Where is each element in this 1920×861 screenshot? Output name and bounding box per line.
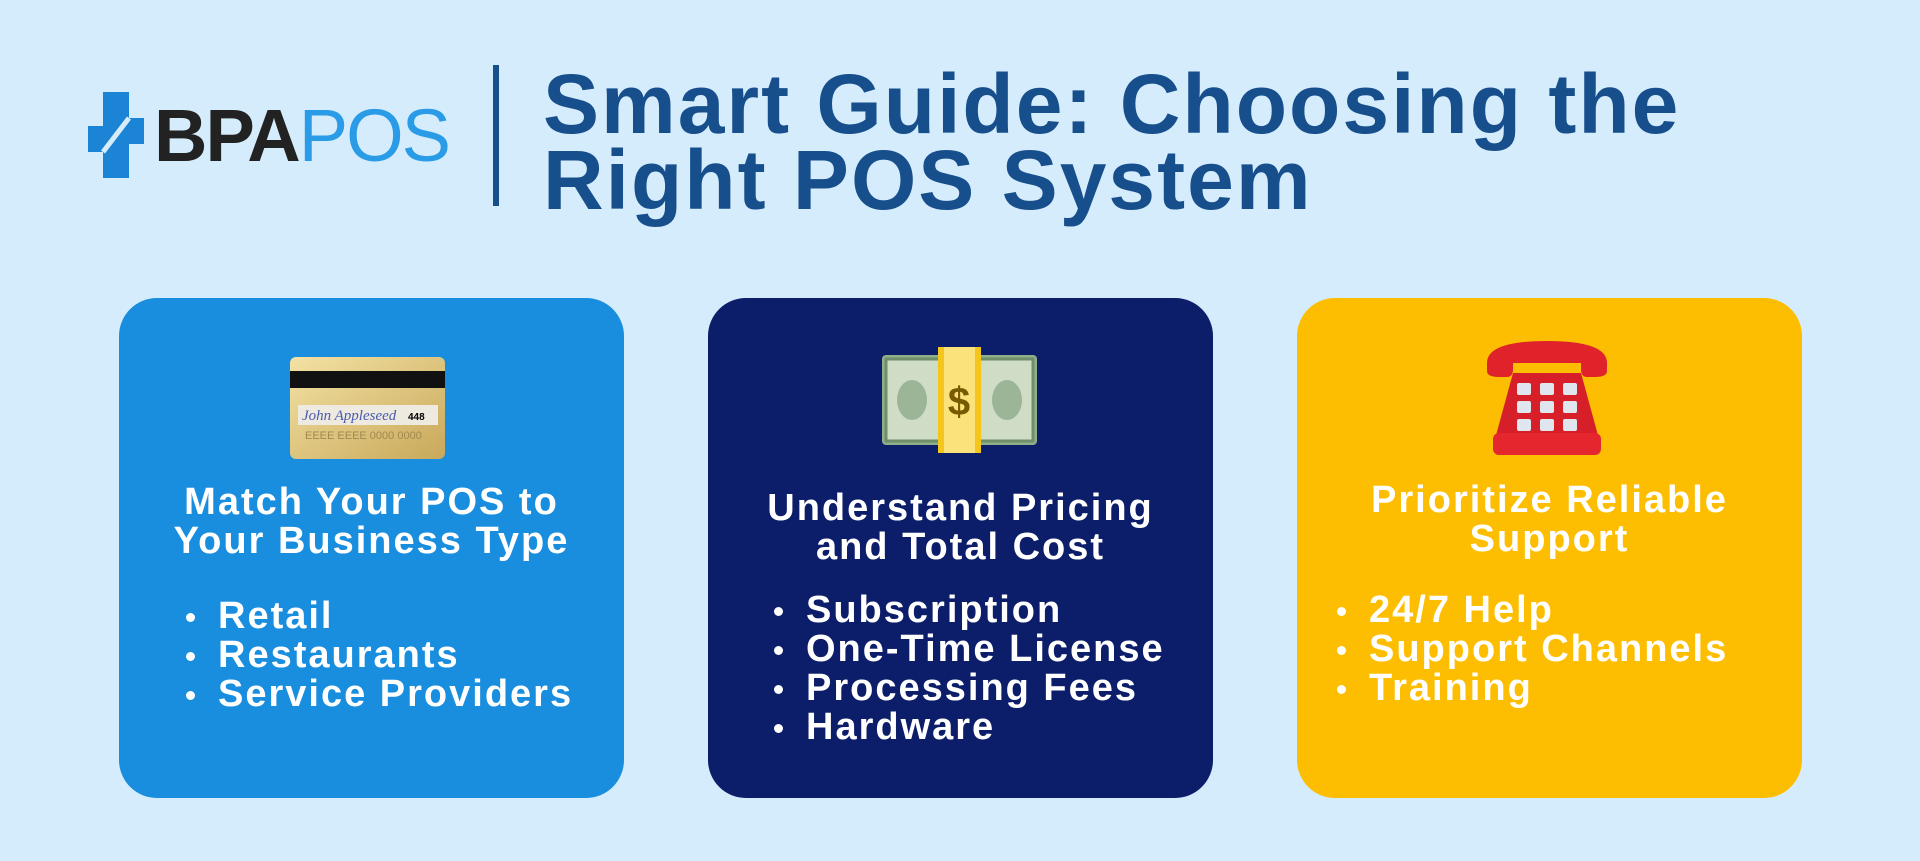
heading: Support	[1470, 518, 1629, 560]
heading: Prioritize Reliable	[1371, 479, 1728, 521]
list: Hardware	[806, 706, 995, 748]
panel: business type	[119, 298, 624, 798]
title: Right POS System	[543, 133, 1313, 227]
list	[1337, 589, 1728, 709]
icon: credit card: John Appleseed	[302, 408, 397, 424]
logo	[88, 92, 449, 178]
list	[186, 595, 573, 715]
icon: telephone	[1487, 341, 1607, 455]
heading: Match Your POS to	[184, 481, 559, 523]
heading	[1371, 479, 1728, 560]
heading: and Total Cost	[816, 526, 1105, 568]
list: Subscription	[806, 589, 1062, 631]
icon: credit card: EEEE EEEE 0000 0000	[305, 430, 422, 442]
icon: logo cross	[88, 92, 144, 178]
list: Processing Fees	[806, 667, 1138, 709]
list: 24/7 Help	[1369, 589, 1554, 631]
heading	[767, 487, 1154, 568]
list	[774, 589, 1165, 748]
title: Smart Guide: Choosing the	[543, 57, 1680, 151]
list: Training	[1369, 667, 1533, 709]
icon: credit card	[290, 357, 445, 459]
list: Restaurants	[218, 634, 460, 676]
divider	[493, 65, 499, 206]
icon: credit card: 448	[408, 412, 425, 423]
title	[543, 57, 1680, 227]
list: Service Providers	[218, 673, 573, 715]
panel: support	[1297, 298, 1802, 798]
heading: Your Business Type	[174, 520, 569, 562]
list: One-Time License	[806, 628, 1165, 670]
heading: Understand Pricing	[767, 487, 1154, 529]
heading	[174, 481, 569, 562]
panel: pricing	[708, 298, 1213, 798]
list: Support Channels	[1369, 628, 1728, 670]
logo text: BPAPOS	[154, 94, 449, 177]
icon: money: $	[948, 380, 970, 424]
list: Retail	[218, 595, 333, 637]
icon: money	[882, 347, 1037, 453]
